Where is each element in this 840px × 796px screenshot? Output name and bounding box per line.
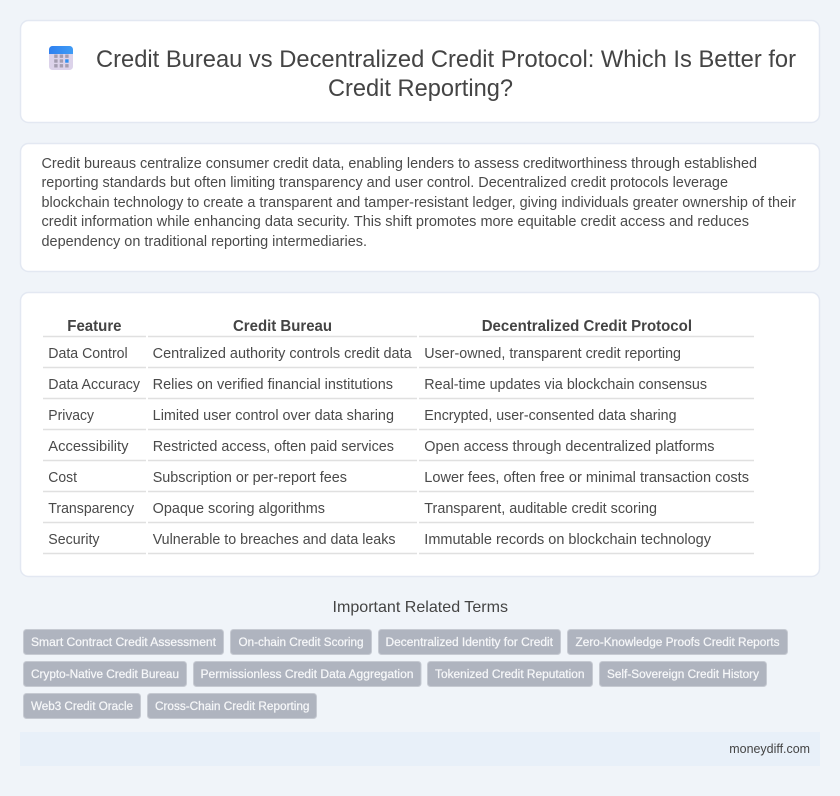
- tag: [230, 630, 372, 654]
- tag: [428, 662, 592, 686]
- table header row: Decentralized Credit Protocol: [482, 318, 692, 335]
- panel: introduction text: [20, 144, 820, 272]
- heading: important related terms: Important Related Terms: [332, 599, 508, 616]
- table row: cost: [43, 470, 754, 492]
- tag: Zero-Knowledge Proofs Credit Reports: [576, 635, 780, 649]
- table row: transparency: Opaque scoring algorithms: [153, 501, 325, 517]
- tag: [600, 662, 766, 686]
- tag: On-chain Credit Scoring: [238, 635, 364, 649]
- table row: data accuracy: Data Accuracy: [48, 377, 141, 393]
- table row: data control: User-owned, transparent credit reporting: [424, 346, 681, 362]
- table row: cost: Cost: [48, 470, 77, 486]
- tag: Web3 Credit Oracle: [31, 699, 133, 713]
- table row: data accuracy: [43, 377, 754, 398]
- table row: security: Immutable records on blockchain technology: [424, 532, 712, 548]
- table row: transparency: [43, 501, 754, 522]
- table row: accessibility: Accessibility: [48, 439, 129, 455]
- table row: privacy: Privacy: [48, 408, 95, 424]
- tag: [24, 694, 140, 718]
- table row: transparency: Transparent, auditable credit scoring: [424, 501, 657, 517]
- table row: security: [43, 532, 754, 554]
- table row: accessibility: [43, 439, 754, 460]
- tag: [24, 630, 224, 654]
- panel: introduction text: blockchain technology to create a transparent and tamper-resistant ledger, giving individuals greater ownership of their: [42, 195, 796, 211]
- panel: introduction text: credit information while enhancing data security. This shift promotes more equitable credit access and reduces: [42, 214, 749, 230]
- tag: [568, 630, 788, 654]
- heading: main title: Credit Reporting?: [328, 75, 513, 102]
- panel: introduction text: reporting standards but often limiting transparency and user control. Decentralized credit protocols leverage: [42, 175, 728, 191]
- tag: Self-Sovereign Credit History: [607, 667, 760, 681]
- panel: introduction text: dependency on traditional reporting intermediaries.: [42, 234, 367, 250]
- panel: introduction text: Credit bureaus centralize consumer credit data, enabling lenders to assess creditworthiness through established: [42, 156, 757, 172]
- table header row: Feature: [67, 318, 122, 335]
- table row: security: Vulnerable to breaches and data leaks: [153, 532, 396, 548]
- panel: title card: [20, 20, 820, 122]
- tag: Tokenized Credit Reputation: [435, 667, 585, 681]
- tag: [378, 630, 560, 654]
- table row: data control: Data Control: [48, 346, 128, 362]
- panel: related term tags: [24, 630, 788, 718]
- tag: Smart Contract Credit Assessment: [31, 635, 217, 649]
- table header row: [43, 318, 754, 336]
- table row: data accuracy: Relies on verified financial institutions: [153, 377, 393, 393]
- table row: data control: [43, 346, 754, 368]
- table row: data accuracy: Real-time updates via blockchain consensus: [424, 377, 707, 393]
- table row: accessibility: Restricted access, often paid services: [153, 439, 394, 455]
- heading: main title: [96, 46, 796, 102]
- table row: privacy: [43, 408, 754, 430]
- table row: cost: Subscription or per-report fees: [153, 470, 347, 486]
- heading: main title: Credit Bureau vs Decentralized Credit Protocol: Which Is Better for: [96, 46, 796, 73]
- tag: Crypto-Native Credit Bureau: [31, 667, 179, 681]
- table header row: Credit Bureau: [233, 318, 332, 335]
- table row: transparency: Transparency: [48, 501, 135, 517]
- panel: comparison table: [20, 292, 820, 576]
- tag: [194, 662, 421, 686]
- tag: Permissionless Credit Data Aggregation: [200, 667, 414, 681]
- table row: accessibility: Open access through decentralized platforms: [424, 439, 714, 455]
- table row: cost: Lower fees, often free or minimal transaction costs: [424, 470, 749, 486]
- footer bar: [20, 732, 820, 766]
- table row: data control: Centralized authority controls credit data: [153, 346, 412, 362]
- tag: Decentralized Identity for Credit: [386, 635, 554, 649]
- tag: [148, 694, 316, 718]
- footer source label: moneydiff.com: [729, 741, 810, 756]
- table row: security: Security: [48, 532, 100, 548]
- tag: [24, 662, 186, 686]
- table row: privacy: Limited user control over data sharing: [153, 408, 394, 424]
- table row: privacy: Encrypted, user-consented data sharing: [424, 408, 676, 424]
- tag: Cross-Chain Credit Reporting: [155, 699, 310, 713]
- icon: calendar: [49, 46, 73, 70]
